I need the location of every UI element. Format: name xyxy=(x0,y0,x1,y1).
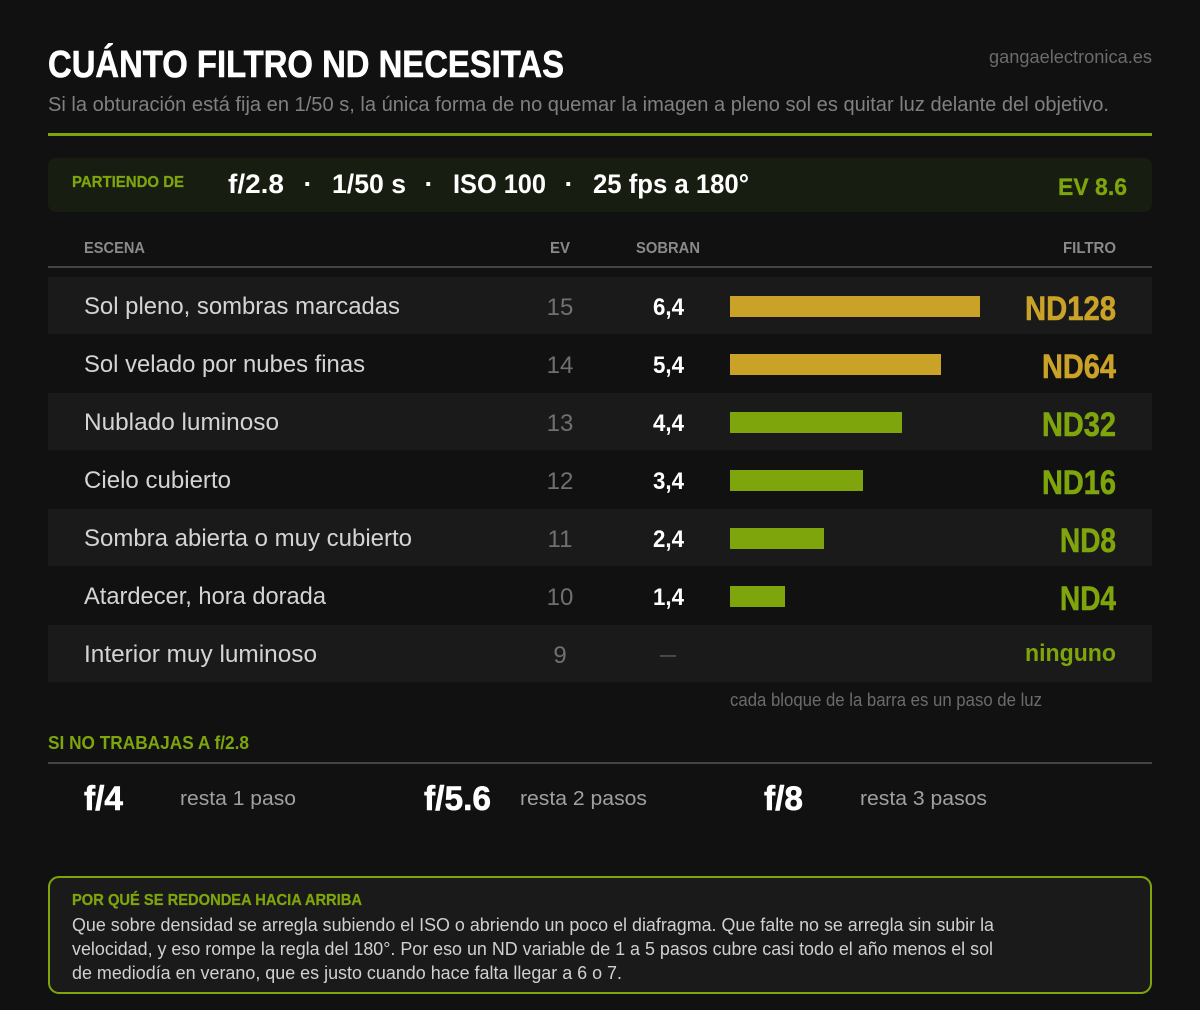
row: sol velado: Sol velado por nubes finas xyxy=(84,351,365,378)
subtitle: Si la obturación está fija en 1/50 s, la única forma de no quemar la imagen a pleno sol es quitar luz delante del objetivo. xyxy=(48,94,1109,116)
aperture: f/2.8 xyxy=(228,169,284,199)
row: cielo cubierto xyxy=(48,451,1152,508)
brand: gangaelectronica.es xyxy=(989,47,1152,67)
callout body: velocidad, y eso rompe la regla del 180°. Por eso un ND variable de 1 a 5 pasos cubre casi todo el año menos el sol xyxy=(72,939,993,959)
aperture f/4: f/4 xyxy=(84,780,123,818)
row: nublado luminoso: 4,4 xyxy=(653,410,685,437)
row: sol pleno: 15 xyxy=(547,294,573,321)
row: sol velado: 14 xyxy=(547,352,573,379)
row: atardecer: 10 xyxy=(547,584,573,611)
ISO: ISO 100 xyxy=(453,169,546,199)
bar note: cada bloque de la barra es un paso de luz xyxy=(730,690,1042,710)
row: sombra abierta: ND8 xyxy=(1060,522,1116,560)
table header: SOBRAN xyxy=(636,240,700,257)
aperture f/5.6: f/5.6 xyxy=(424,780,491,818)
row: nublado luminoso: Nublado luminoso xyxy=(84,409,279,436)
row: nublado luminoso xyxy=(48,393,1152,450)
row: interior: 9 xyxy=(553,642,567,669)
callout body: de mediodía en verano, que es justo cuando hace falta llegar a 6 o 7. xyxy=(72,963,622,983)
row: cielo cubierto: 3,4 xyxy=(653,468,685,495)
row: sol pleno: Sol pleno, sombras marcadas xyxy=(84,293,400,320)
row: atardecer xyxy=(48,567,1152,624)
panel: starting settings xyxy=(48,158,1152,212)
starting label: PARTIENDO DE xyxy=(72,174,184,191)
row: sombra abierta: 2,4 xyxy=(653,526,685,553)
table header: EV xyxy=(550,240,570,257)
callout body xyxy=(72,915,995,983)
row: cielo cubierto: ND16 xyxy=(1042,464,1116,502)
row: sombra abierta: Sombra abierta o muy cubierto xyxy=(84,525,412,552)
row: cielo cubierto: 12 xyxy=(547,468,573,495)
table header xyxy=(84,240,1116,257)
aperture f/5.6: resta 2 pasos xyxy=(520,788,647,810)
row: sol velado: 5,4 xyxy=(653,352,685,379)
row: interior xyxy=(48,625,1152,682)
row: nublado luminoso: 13 xyxy=(547,410,573,437)
row: cielo cubierto: Cielo cubierto xyxy=(84,467,231,494)
row: sol velado xyxy=(48,335,1152,392)
aperture f/8 xyxy=(764,780,987,818)
row: atardecer: Atardecer, hora dorada xyxy=(84,583,327,610)
row: nublado luminoso: ND32 xyxy=(1042,406,1116,444)
aperture f/8: f/8 xyxy=(764,780,803,818)
row: atardecer: 1,4 xyxy=(653,584,685,611)
title: CUÁNTO FILTRO ND NECESITAS xyxy=(48,42,564,86)
row: sol pleno: ND128 xyxy=(1025,290,1116,328)
aperture section heading: SI NO TRABAJAS A f/2.8 xyxy=(48,733,249,753)
frame rate: 25 fps a 180° xyxy=(593,169,749,199)
table header: FILTRO xyxy=(1063,240,1116,257)
row: interior: ninguno xyxy=(1025,640,1116,667)
aperture f/8: resta 3 pasos xyxy=(860,788,987,810)
callout body: Que sobre densidad se arregla subiendo el ISO o abriendo un poco el diafragma. Que falte no se arregla sin subir la xyxy=(72,915,995,935)
panel: starting settings: · xyxy=(564,169,574,199)
callout xyxy=(49,877,1151,993)
row: sombra abierta xyxy=(48,509,1152,566)
EV value: EV 8.6 xyxy=(1058,174,1127,201)
row: sol pleno: 6,4 xyxy=(653,294,685,321)
panel: starting settings: · xyxy=(424,169,434,199)
table header: ESCENA xyxy=(84,240,145,257)
aperture f/4 xyxy=(84,780,296,818)
row: atardecer: ND4 xyxy=(1060,580,1116,618)
row: interior: — xyxy=(660,647,676,664)
shutter: 1/50 s xyxy=(332,169,406,199)
panel: starting settings: · xyxy=(304,169,312,199)
aperture f/4: resta 1 paso xyxy=(180,788,296,810)
row: sol pleno xyxy=(48,277,1152,334)
row: sol velado: ND64 xyxy=(1042,348,1116,386)
aperture f/5.6 xyxy=(424,780,647,818)
row: sombra abierta: 11 xyxy=(548,526,572,553)
callout heading: POR QUÉ SE REDONDEA HACIA ARRIBA xyxy=(72,890,362,909)
row: interior: Interior muy luminoso xyxy=(84,641,317,668)
